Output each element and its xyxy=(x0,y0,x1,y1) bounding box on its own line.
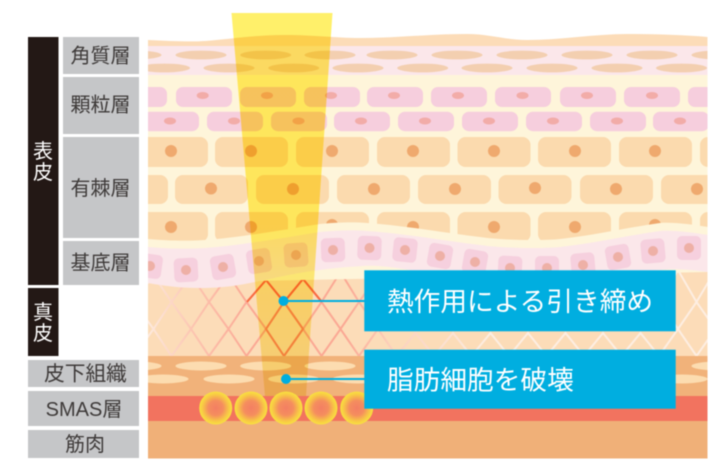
dermis collagen mesh xyxy=(134,270,716,356)
pointer: dermis xyxy=(278,296,366,306)
label: 真皮: 皮 xyxy=(33,322,53,345)
label: 表皮: 表 xyxy=(33,140,53,163)
label: 表皮: 皮 xyxy=(33,161,53,184)
callout: heat tightening: 熱作用による引き締め xyxy=(387,287,653,317)
label: 角質層: 角質層 xyxy=(70,44,130,68)
label: 顆粒層: 顆粒層 xyxy=(70,94,130,116)
callout: heat tightening xyxy=(364,270,676,331)
cream background xyxy=(148,75,708,255)
label: 表皮 xyxy=(28,37,58,285)
pointer: fat xyxy=(281,374,366,384)
stratum corneum xyxy=(110,34,720,76)
label: SMAS層: SMAS層 xyxy=(46,399,122,421)
callout: fat cell destruction xyxy=(364,350,676,409)
SMAS layer xyxy=(148,396,708,421)
heated SMAS points xyxy=(199,392,373,424)
label: 有棘層 xyxy=(63,137,139,238)
muscle layer xyxy=(148,421,708,459)
ultrasound beam xyxy=(232,13,332,396)
subcutaneous tissue xyxy=(110,356,720,397)
cream wavy band xyxy=(148,222,708,283)
label: 基底層 xyxy=(63,241,139,285)
dermis background xyxy=(148,272,708,356)
label: 顆粒層 xyxy=(63,77,139,134)
label: 筋肉: 筋肉 xyxy=(65,433,105,456)
label: 基底層: 基底層 xyxy=(70,252,130,274)
granular layer cells xyxy=(111,87,720,131)
label: 角質層 xyxy=(63,37,139,74)
panel: skin cross-section xyxy=(147,34,708,460)
basal layer cells xyxy=(136,236,701,283)
spinous layer cells xyxy=(148,136,708,241)
label: 皮下組織: 皮下組織 xyxy=(44,362,127,386)
callout: fat cell destruction: 脂肪細胞を破壊 xyxy=(387,366,574,396)
label: 真皮: 真 xyxy=(33,301,53,324)
heated collagen fibres xyxy=(246,280,322,356)
basal layer band xyxy=(148,230,708,288)
label: 有棘層: 有棘層 xyxy=(70,177,130,200)
label: 真皮 xyxy=(28,288,58,356)
label: 皮下組織 xyxy=(28,360,139,387)
panel: layer labels xyxy=(28,37,139,458)
label: SMAS層 xyxy=(28,391,139,426)
label: 筋肉 xyxy=(28,430,139,458)
